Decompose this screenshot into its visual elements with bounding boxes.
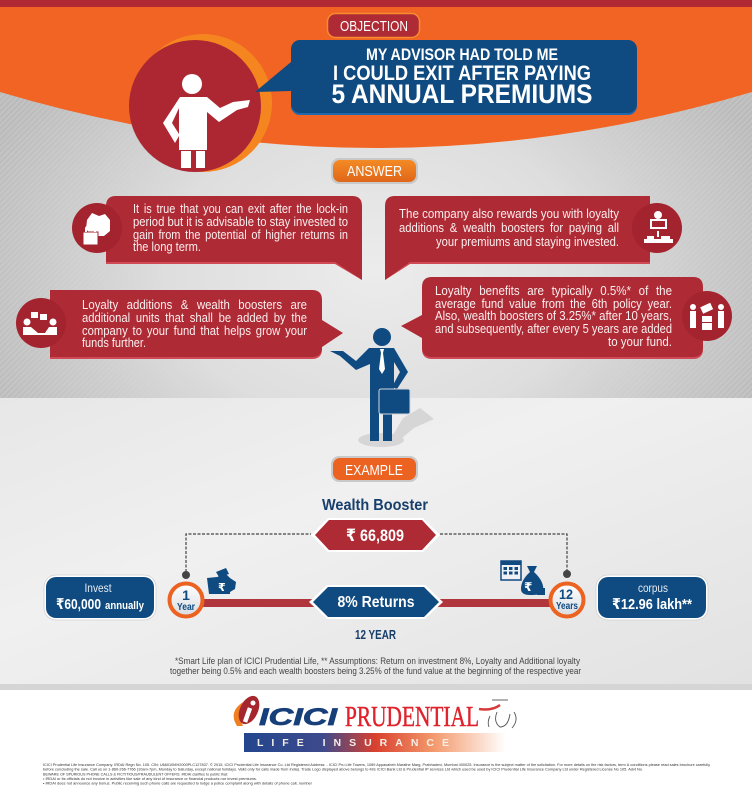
logo tagline: LIFE INSURANCE <box>257 737 449 749</box>
icon: money bag <box>521 566 545 595</box>
legal fine print: • IRDAI does not announce any bonus. Public receiving such phone calls are requested to lodge a police complaint along with details of phone call, number <box>43 782 313 786</box>
icon: rewards stack <box>632 203 682 253</box>
text: rewards: your premiums and staying invested. <box>436 234 619 249</box>
logo mark <box>234 693 263 727</box>
text: rewards: The company also rewards you with loyalty <box>399 206 619 221</box>
tie <box>379 349 385 374</box>
returns value <box>309 585 443 619</box>
corpus box <box>596 575 708 620</box>
objector portrait <box>129 34 272 172</box>
returns line <box>200 599 555 607</box>
example background <box>0 398 752 684</box>
legal fine print <box>43 763 710 786</box>
icon: money bag: ₹ <box>524 580 532 594</box>
answer bubble: loyalty benefits <box>401 277 732 359</box>
text: loyalty benefits: and subsequently, after every 5 years are added <box>435 321 672 336</box>
answer bubble: rewards <box>385 196 682 280</box>
text: lock-in: period but it is advisable to stay invested to <box>133 214 348 229</box>
answer bubble: loyalty additions <box>16 290 343 359</box>
invest box <box>44 575 156 620</box>
wealth booster value <box>311 518 440 552</box>
answering advisor figure <box>330 328 434 447</box>
icon: locked piggy bank <box>72 203 122 253</box>
text: loyalty additions: company to your fund that helps grow your <box>82 323 308 338</box>
text: loyalty benefits: average fund value from the 6th policy year. <box>435 296 672 311</box>
legal fine print: BEWARE OF SPURIOUS PHONE CALLS & FICTITIOUS/FRAUDULENT OFFERS. IRDAI clarifies to public that: <box>43 772 228 776</box>
footnote: together being 0.5% and each wealth boosters being 3.25% of the fund value at the beginning of the respective year <box>170 666 581 677</box>
milestone: 1 year: Year <box>177 602 195 613</box>
footer divider <box>0 684 752 690</box>
text: lock-in <box>133 201 348 254</box>
legal fine print: ICICI Prudential Life Insurance Company. IRDAI Regn No. 105. CIN: U66010MH2000PLC127837. © 2015, ICICI Prudential Life Insurance Co. Ltd Registered Address: - ICICI Pru Life Towers, 1089 Appasaheb Marathe Marg, Prabhadevi, Mumbai 400025. Insurance is the subject matter of the solicitation. For more details on the risk factors, term & conditions please read sales brochure carefully <box>43 763 710 767</box>
text: loyalty additions <box>82 297 308 350</box>
logo wordmark ICICI: ICICI <box>259 704 339 731</box>
milestone: 12 years: Years <box>556 601 578 612</box>
milestone: 1 year <box>170 571 202 616</box>
milestone: 12 years: 12 <box>559 586 573 602</box>
wealth booster value: ₹ 66,809 <box>346 526 404 545</box>
logo head emblem <box>479 700 516 728</box>
returns value: 8% Returns <box>338 594 415 611</box>
icon: piggy bank: ₹ <box>218 582 226 594</box>
objection speech bubble: I COULD EXIT AFTER PAYING <box>333 62 591 85</box>
text: loyalty additions: funds further. <box>82 335 146 350</box>
text: loyalty benefits: to your fund. <box>608 334 672 349</box>
milestone: 1 year: 1 <box>182 587 190 603</box>
briefcase <box>379 389 410 414</box>
icon: calendar <box>501 561 521 580</box>
icon: handshake <box>16 298 66 348</box>
text: lock-in: the long term. <box>133 239 201 254</box>
figure shadow <box>358 408 434 447</box>
legal fine print: before concluding the sale. Call us on 1-860-266-7766 (10am-7pm, Monday to Saturday, except national holidays. Valid only for calls made from India). Trade Logo displayed above belongs to M/s ICICI Bank Ltd & Prudential IP services Ltd which used be used by ICICI Prudential Life Insurance Company Ltd under Registered License No 105. Advt No. <box>43 768 643 772</box>
invest box: annually <box>105 600 145 612</box>
objection speech bubble <box>255 40 637 115</box>
invest box: Invest <box>84 581 112 595</box>
objection speech bubble: MY ADVISOR HAD TOLD ME <box>366 45 558 64</box>
text: rewards <box>399 206 619 249</box>
duration label: 12 YEAR <box>355 627 396 642</box>
footer background <box>0 690 752 793</box>
footnote <box>170 656 581 677</box>
text: loyalty benefits <box>435 283 672 349</box>
answer bubble: lock-in <box>72 196 362 280</box>
icon: piggy bank <box>207 568 236 594</box>
orange header band <box>0 6 752 148</box>
corpus box: ₹12.96 lakh** <box>612 596 692 613</box>
grey answer background <box>0 85 752 398</box>
logo wordmark Prudential: PRUDENTIAL <box>345 701 479 733</box>
answer pill: ANSWER <box>347 163 402 180</box>
objection pill: OBJECTION <box>340 18 408 35</box>
top red strip <box>0 0 752 7</box>
text: loyalty benefits: Loyalty benefits are typically 0.5%* of the <box>435 283 672 298</box>
text: rewards: additions & wealth boosters for paying all <box>399 220 619 235</box>
text: lock-in: gain from the potential of higher returns in <box>133 227 348 242</box>
legal fine print: • IRDAI or its officials do not involve in activities like sale of any kind of insurance or financial products nor invest premiums. <box>43 777 257 781</box>
text: loyalty additions: Loyalty additions & wealth boosters are <box>82 297 307 312</box>
milestone: 12 years <box>550 570 584 616</box>
icon: objector figure <box>163 74 250 168</box>
answer pill <box>331 158 418 184</box>
wealth booster heading: Wealth Booster <box>322 497 428 514</box>
objection pill <box>328 14 420 38</box>
objection speech bubble: 5 ANNUAL PREMIUMS <box>332 79 592 109</box>
corpus box: corpus <box>638 581 668 595</box>
connector: dashed line <box>186 534 567 572</box>
example pill <box>331 456 418 482</box>
text: loyalty additions: additional units that shall be added by the <box>82 310 307 325</box>
icon: people with box <box>682 291 732 341</box>
invest box: ₹60,000 <box>56 596 101 613</box>
logo: ICICI Prudential Life Insurance <box>234 693 516 752</box>
text: lock-in: It is true that you can exit after the lock-in <box>133 201 348 216</box>
logo band <box>244 733 506 752</box>
figure body <box>330 348 408 395</box>
text: loyalty benefits: Also, wealth boosters of 3.25%* after 10 years, <box>435 308 672 323</box>
footnote: *Smart Life plan of ICICI Prudential Life, ** Assumptions: Return on investment 8%, Loyalty and Additional loyalty <box>175 656 580 667</box>
example pill: EXAMPLE <box>345 462 403 479</box>
